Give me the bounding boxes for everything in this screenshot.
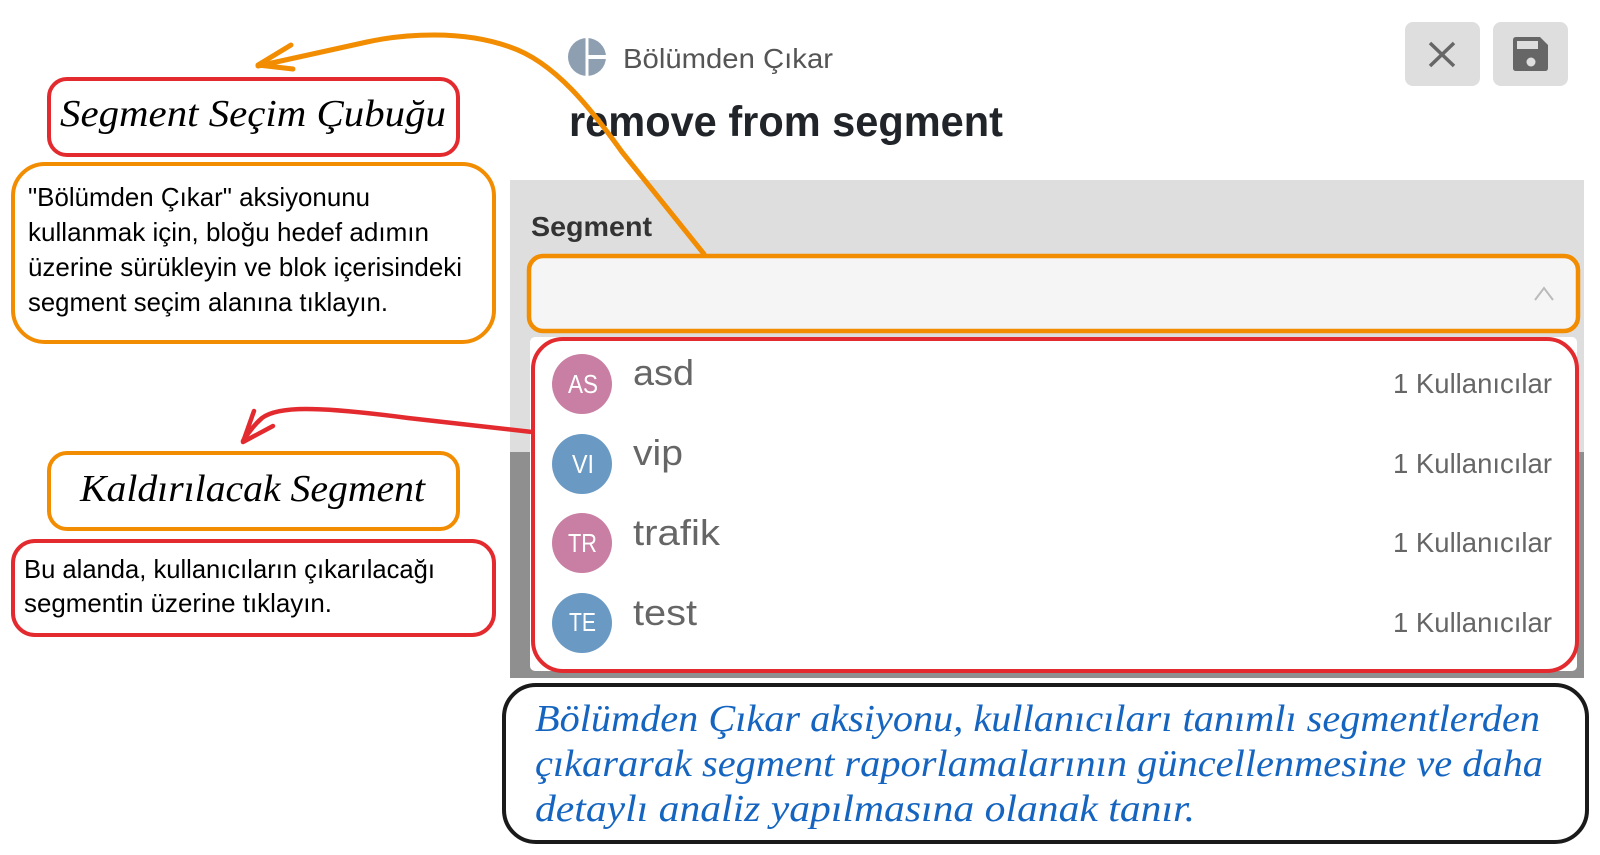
panel: dialog background bbox=[510, 180, 1584, 678]
callout: usage instructions: üzerine sürükleyin ve blok içerisindeki bbox=[28, 252, 462, 282]
callout: summary: çıkararak segment raporlamalarının güncellenmesine ve daha bbox=[535, 743, 1543, 785]
segment row: vip: VI bbox=[572, 449, 594, 479]
segment select field, highlighted bbox=[529, 256, 1578, 331]
button: save bbox=[1493, 22, 1568, 86]
arrow: select field to heading bbox=[258, 35, 704, 254]
segment row: test: test bbox=[633, 592, 697, 633]
segment row: asd: 1 Kullanıcılar bbox=[1393, 368, 1552, 399]
callout: usage instructions: kullanmak için, bloğu hedef adımın bbox=[28, 217, 429, 247]
callout: summary: Bölümden Çıkar aksiyonu, kullanıcıları tanımlı segmentlerden bbox=[535, 698, 1540, 740]
icon: action logo bbox=[568, 37, 608, 77]
segment row: test: 1 Kullanıcılar bbox=[1393, 607, 1552, 638]
action name: Bölümden Çıkar bbox=[623, 43, 833, 74]
callout: click the segment: Bu alanda, kullanıcıların çıkarılacağı bbox=[24, 554, 435, 584]
segment row: trafik: 1 Kullanıcılar bbox=[1393, 527, 1552, 558]
segment row: test bbox=[552, 592, 1552, 653]
segment row: trafik: TR bbox=[568, 528, 597, 558]
field label: Segment: Segment bbox=[531, 211, 652, 242]
segment row: test: TE bbox=[569, 607, 596, 637]
callout: summary: detaylı analiz yapılmasına olanak tanır. bbox=[535, 788, 1195, 830]
highlight: segment list bbox=[533, 339, 1577, 671]
callout: usage instructions: "Bölümden Çıkar" aksiyonunu bbox=[28, 182, 370, 212]
heading: Segment Seçim Çubuğu: Segment Seçim Çubuğu bbox=[60, 93, 446, 135]
callout: usage instructions: segment seçim alanına tıklayın. bbox=[28, 287, 388, 317]
title: remove from segment bbox=[569, 98, 1003, 146]
callout: click the segment bbox=[13, 541, 494, 635]
heading: Segment Seçim Çubuğu bbox=[49, 79, 458, 155]
segment row: vip bbox=[552, 432, 1552, 494]
dropdown card bbox=[530, 337, 1577, 671]
segment row: trafik bbox=[552, 512, 1552, 573]
callout: usage instructions bbox=[13, 164, 494, 342]
segment row: vip: 1 Kullanıcılar bbox=[1393, 448, 1552, 479]
callout: click the segment: segmentin üzerine tıklayın. bbox=[24, 588, 332, 618]
callout: summary bbox=[504, 685, 1587, 842]
segment row: trafik: trafik bbox=[633, 512, 721, 553]
button: close bbox=[1405, 22, 1480, 86]
segment row: asd: asd bbox=[633, 352, 694, 393]
segment row: vip: vip bbox=[633, 432, 683, 473]
arrow: segment list to heading bbox=[243, 409, 532, 442]
heading: Kaldırılacak Segment bbox=[49, 453, 458, 529]
heading: Kaldırılacak Segment: Kaldırılacak Segment bbox=[79, 468, 426, 510]
segment row: asd: AS bbox=[568, 369, 598, 399]
segment row: asd bbox=[552, 352, 1552, 414]
